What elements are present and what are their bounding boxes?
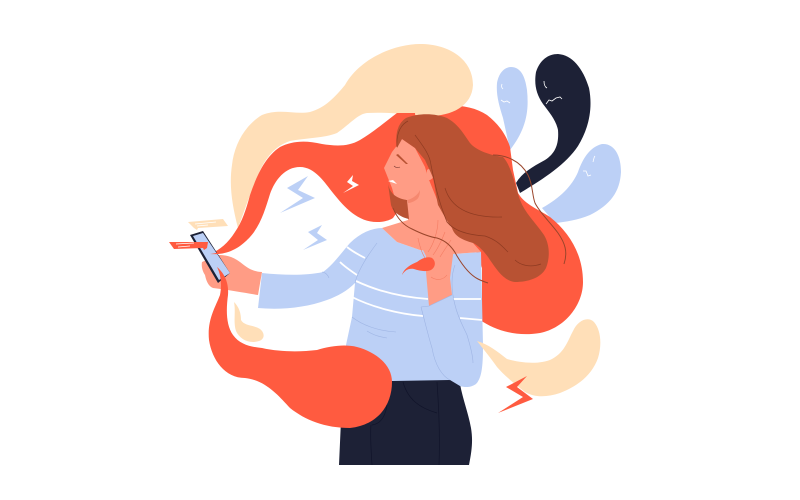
trousers: [339, 376, 472, 465]
blob: navy: [516, 54, 591, 193]
hair lock by face: [388, 184, 409, 219]
sweater fold lines: [322, 243, 396, 338]
mouth: [388, 180, 397, 184]
finger lines: [418, 220, 451, 279]
neck shadow: [407, 190, 420, 203]
red wave tip over phone: [210, 238, 247, 254]
sweater cuff: [421, 295, 463, 365]
blob: light blue right: [542, 144, 621, 223]
message bubble: red: [169, 242, 208, 250]
red wave: right side behind hair: [397, 105, 583, 334]
sweater body and arm: [258, 228, 483, 387]
message bubble: peach: [188, 219, 228, 230]
ear: [426, 169, 434, 180]
icon: blue lightning bolt small: [303, 225, 327, 250]
red wave: lower sweep from phone: [209, 267, 392, 428]
blob: small peach: [234, 302, 264, 342]
phone: [190, 231, 230, 283]
right hand raised: [418, 220, 473, 380]
loose hair strands: [393, 155, 566, 283]
left hand skin: [202, 255, 262, 295]
eye and brow: [396, 154, 408, 164]
red tongue shape near hand: [402, 257, 435, 275]
sweater stripes: [340, 247, 482, 320]
icon: blue lightning bolt large: [280, 176, 315, 213]
icon: white lightning bolt: [343, 175, 359, 193]
blob: light blue left: [497, 67, 528, 150]
face: [384, 139, 434, 203]
blob: large peach: [231, 44, 473, 228]
hair strands: [397, 121, 541, 266]
long hair: [388, 114, 549, 282]
neck and chest: [382, 170, 481, 254]
icon: red lightning bolt: [498, 376, 533, 413]
red wave: left sweep over peach: [210, 113, 420, 254]
lower peach blob: [477, 319, 600, 396]
